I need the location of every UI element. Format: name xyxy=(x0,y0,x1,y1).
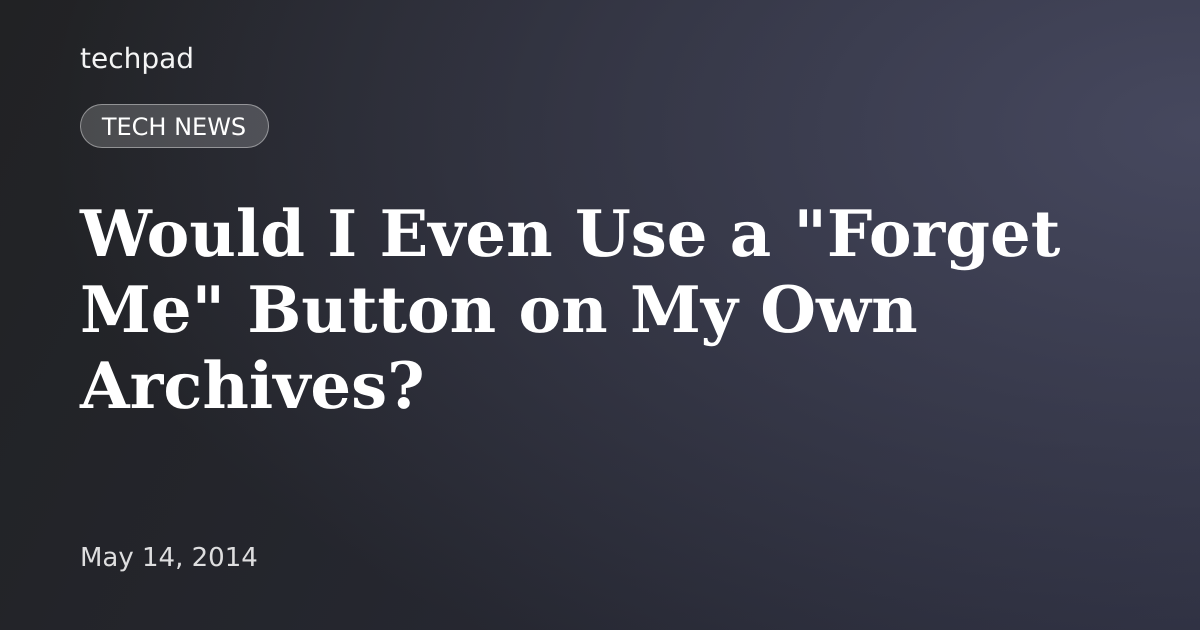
title: Archives? xyxy=(80,349,425,424)
date: May 14, 2014 xyxy=(80,543,258,573)
title: Would I Even Use a "Forget xyxy=(80,197,1060,272)
brand name: techpad xyxy=(80,42,194,75)
title xyxy=(79,197,1060,424)
title: Me" Button on My Own xyxy=(80,273,918,348)
category badge: TECH NEWS xyxy=(102,112,246,140)
category badge xyxy=(80,104,268,148)
